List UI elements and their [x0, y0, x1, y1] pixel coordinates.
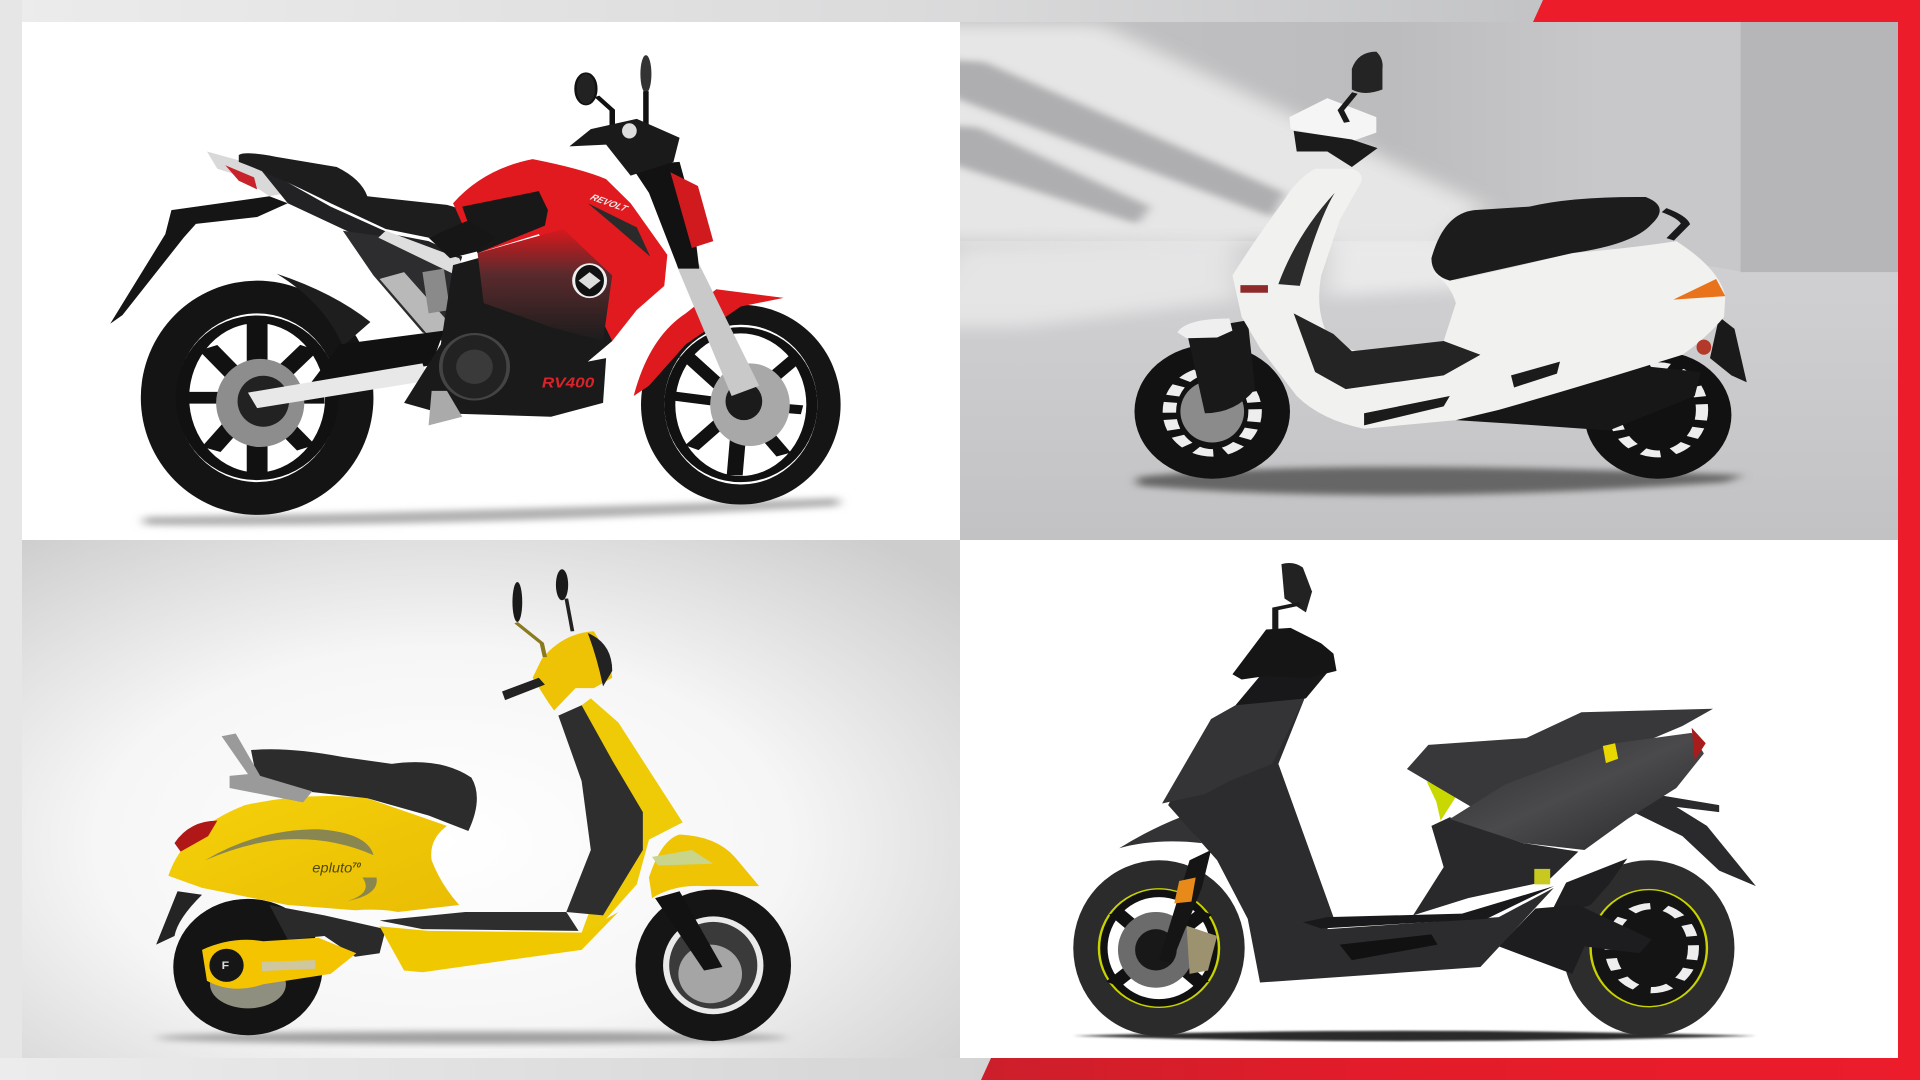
light streaks [899, 24, 1499, 327]
frame: red band bottom [981, 1058, 1920, 1080]
lower leg shield and floor body [1168, 695, 1554, 983]
ground shadow [144, 498, 839, 526]
ground shadow [1138, 467, 1744, 495]
tail dot [1697, 340, 1711, 355]
shock spring [1534, 869, 1550, 884]
wheel hugger [1548, 859, 1627, 919]
side vent [1340, 934, 1438, 960]
seat [1407, 709, 1713, 807]
rear hanger [1710, 317, 1747, 382]
front wheel [641, 305, 841, 505]
upper leg shield [1162, 695, 1306, 803]
rear wheel [173, 899, 323, 1035]
mid section [1413, 817, 1578, 915]
model badge: epluto [312, 861, 352, 876]
battery panel [478, 229, 612, 341]
rear wheel [141, 281, 373, 515]
rear fender [156, 891, 202, 945]
hand grip [502, 678, 545, 700]
panel: black scooter [960, 540, 1920, 1080]
front fork cover [1187, 320, 1255, 413]
floor board [380, 912, 579, 931]
front wheel [1073, 860, 1245, 1036]
mirrors [512, 569, 572, 657]
panel: white scooter [960, 22, 1898, 540]
black knee pad [462, 191, 548, 253]
rear suspension [269, 905, 386, 957]
seat [1431, 197, 1660, 281]
yellow badge [1603, 743, 1618, 763]
studio wall [960, 22, 1740, 241]
tail light [174, 821, 217, 852]
tail lamp [1673, 279, 1725, 300]
front fender [634, 289, 784, 396]
rear swingarm [306, 331, 444, 389]
red tank [453, 159, 667, 341]
yellow strut [1427, 781, 1457, 821]
mirrors and handlebar [569, 55, 680, 176]
tail light [1692, 728, 1706, 760]
brand text: REVOLT [587, 193, 630, 214]
panel: red motorcycle [0, 0, 960, 540]
handlebar head [1289, 98, 1376, 141]
chrome tube [262, 960, 315, 971]
handlebar head [1232, 628, 1337, 679]
model text: RV400 [542, 376, 594, 391]
front fork [1159, 850, 1211, 964]
fork reflector [1174, 878, 1196, 903]
lower body [380, 912, 618, 972]
frame: red corner top right [1533, 0, 1920, 1080]
panel: yellow scooter [0, 540, 960, 1080]
belly pan [404, 248, 612, 417]
mirror [1281, 563, 1312, 612]
grab handle [1664, 210, 1686, 239]
model badge: 70 [352, 861, 362, 870]
footwell [1294, 313, 1480, 389]
scooter body [1232, 169, 1725, 429]
head and headlamp [533, 631, 612, 710]
front fender [649, 834, 759, 898]
floor step [1303, 886, 1554, 928]
underbody [1456, 365, 1701, 430]
tail section [207, 152, 288, 196]
rear suspension bay [343, 231, 459, 344]
rear hugger [277, 274, 370, 346]
neck [1236, 673, 1327, 705]
hub badge [209, 949, 244, 982]
rear fender [1633, 795, 1756, 886]
ground shadow [156, 1031, 787, 1044]
license plate hanger [110, 196, 288, 324]
seat [239, 153, 468, 238]
belt cover [202, 938, 356, 989]
mirror [1352, 52, 1383, 93]
tank logo [574, 264, 606, 297]
body stripes [205, 829, 377, 901]
hub badge: F [222, 959, 229, 972]
front panel slot [1278, 193, 1335, 286]
front wheel [1134, 344, 1290, 479]
seat [251, 749, 477, 831]
rear rack [222, 734, 312, 802]
vents [1364, 362, 1560, 425]
rear storage pod [1450, 733, 1704, 850]
front fender [1177, 319, 1232, 338]
rear body [168, 796, 459, 912]
foot peg [429, 391, 462, 425]
front forks [677, 262, 759, 396]
front fork [655, 891, 722, 970]
shadow stripes [923, 59, 1284, 224]
shock and frame links [380, 272, 456, 336]
front wheel [636, 890, 791, 1041]
swingarm [1499, 905, 1652, 974]
rear wheel [1584, 351, 1731, 479]
rear wheel [1563, 860, 1734, 1036]
front fender [1119, 817, 1202, 848]
leg shield [582, 698, 683, 933]
motor [441, 334, 508, 399]
tank vent [588, 203, 650, 257]
reflector [1240, 285, 1268, 293]
subframe [257, 165, 462, 276]
ground shadow [1073, 1031, 1756, 1041]
